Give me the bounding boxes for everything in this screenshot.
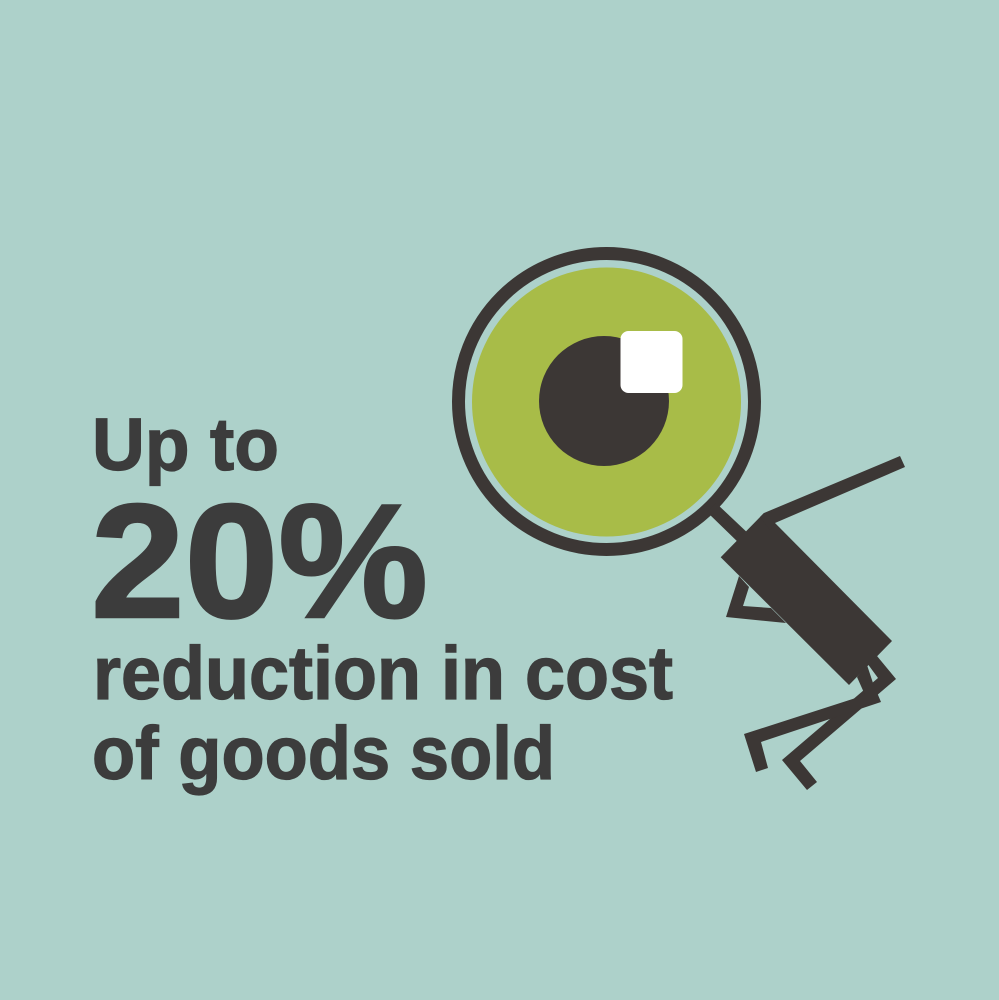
eye: green iris <box>472 268 741 536</box>
leg: right <box>782 656 896 790</box>
magnifying glass shaft <box>707 503 752 546</box>
magnifying glass rim <box>458 254 754 550</box>
text: of goods sold: of goods sold <box>92 711 555 795</box>
eye: pupil <box>539 336 669 466</box>
text block: headline statistic <box>91 403 673 795</box>
leg: left <box>744 665 881 772</box>
text: Up to: Up to <box>92 403 279 486</box>
bent arm <box>726 576 786 623</box>
text: reduction in cost: reduction in cost <box>93 631 673 715</box>
eye: white highlight <box>620 331 682 393</box>
raised arm <box>760 456 905 530</box>
text: 20%: 20% <box>91 471 428 652</box>
magnifying glass handle <box>721 513 892 685</box>
icon: magnifying glass character with eye <box>458 254 905 790</box>
